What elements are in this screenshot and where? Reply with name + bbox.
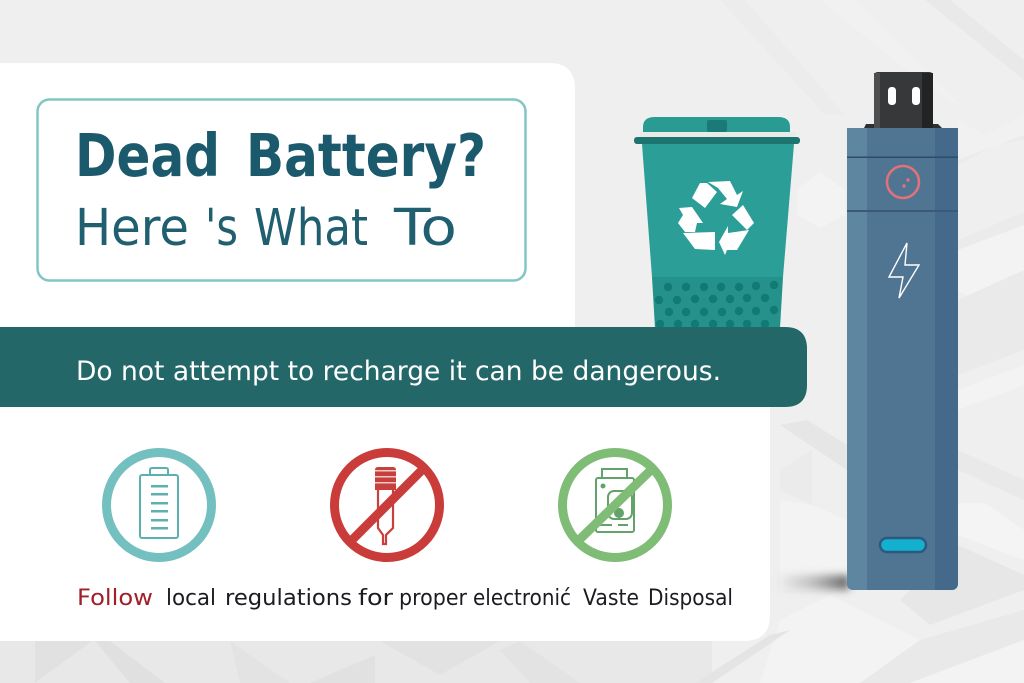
banner text: Do not attempt to recharge it can be dangerous. [76,356,721,387]
heading: Dead Battery?: Dead [75,121,220,190]
dotted base [652,277,783,328]
caption: Follow [77,586,153,611]
device shadow [775,575,849,590]
icon: recycle symbol [678,181,754,255]
caption: for [358,586,394,611]
subheading: Here 's What To: Here [75,199,189,258]
icon: battery [106,452,212,558]
led indicator [880,538,926,552]
caption: Vaste [583,586,639,611]
subheading: Here 's What To [75,199,457,258]
usb connector [864,72,942,128]
icon: no pen device [334,452,440,558]
caption: local [166,586,216,611]
panel: white card [0,63,770,641]
subheading: Here 's What To: 's [205,199,238,258]
subheading: Here 's What To: To [393,199,457,258]
heading: Dead Battery? [75,121,486,190]
caption: electronić [473,586,571,611]
icon: no electronic waste [562,452,668,558]
title box [38,100,526,280]
bin lid [643,117,790,132]
device body [847,128,958,590]
banner [0,327,807,407]
recycling bin [634,117,800,328]
subheading: Here 's What To: What [254,199,368,258]
indicator ring [887,166,919,198]
bin body [642,144,794,277]
caption: regulations [225,586,352,611]
heading: Dead Battery?: Battery? [246,121,486,190]
caption: Disposal [648,586,733,611]
vape device [847,72,958,590]
caption: proper [399,586,468,611]
caption [77,586,733,611]
icon: lightning bolt [889,243,919,298]
